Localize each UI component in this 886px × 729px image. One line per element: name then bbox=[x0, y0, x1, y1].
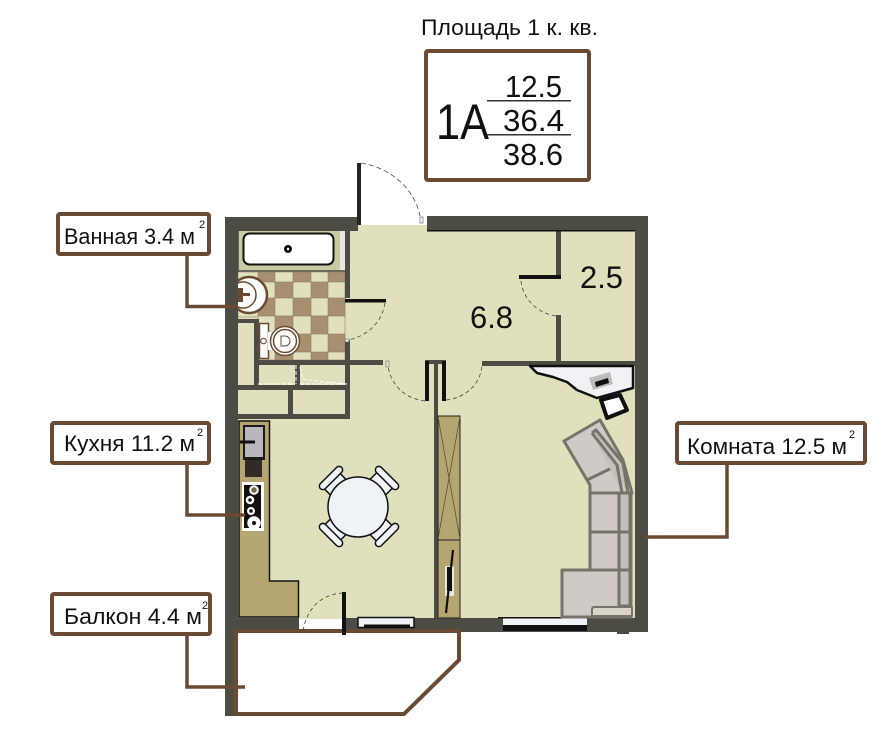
tiled floor bbox=[238, 272, 345, 360]
callout: balcony bbox=[52, 594, 245, 687]
panel: bathroom bbox=[238, 228, 386, 419]
title: Площадь 1 к. кв. bbox=[421, 15, 598, 40]
panel: apartment area summary: 36.4 bbox=[503, 103, 564, 138]
shower screen bbox=[258, 365, 347, 384]
storage room door bbox=[519, 275, 561, 316]
storage niches and walls bbox=[238, 231, 383, 419]
callout: kitchen: 2 bbox=[197, 427, 203, 439]
floor bbox=[238, 225, 636, 619]
balcony door bbox=[303, 592, 346, 635]
sink bbox=[240, 425, 265, 477]
callout: living room: 2 bbox=[849, 429, 855, 441]
entrance door bbox=[357, 163, 423, 225]
callout: bathroom: Ванная 3.4 м bbox=[64, 224, 195, 249]
panel: apartment area summary bbox=[426, 51, 589, 180]
room area numbers bbox=[470, 259, 623, 335]
room area numbers: 6.8 bbox=[470, 299, 513, 335]
panel: kitchen bbox=[239, 421, 400, 617]
room area numbers: 2.5 bbox=[580, 259, 623, 295]
callout: living room: Комната 12.5 м bbox=[687, 434, 847, 459]
balcony door opening bbox=[299, 622, 343, 629]
sofa bbox=[562, 420, 632, 617]
toilet bbox=[260, 324, 300, 358]
room double door bbox=[386, 361, 482, 401]
panel: apartment area summary: 1A bbox=[436, 94, 490, 150]
callout: bathroom bbox=[58, 214, 238, 306]
desk bbox=[530, 366, 633, 398]
stove bbox=[242, 482, 264, 531]
counter bbox=[239, 421, 298, 617]
wardrobe bbox=[438, 416, 460, 540]
room window bbox=[498, 617, 593, 631]
bathtub bbox=[238, 228, 346, 271]
office chair bbox=[601, 395, 627, 418]
balcony outline bbox=[236, 631, 459, 714]
walls bbox=[225, 216, 648, 716]
callout: bathroom: 2 bbox=[199, 219, 205, 231]
dining table with chairs bbox=[318, 465, 400, 548]
washbasin bbox=[231, 277, 267, 313]
callout: kitchen: Кухня 11.2 м bbox=[64, 431, 195, 456]
callout: living room bbox=[646, 423, 865, 537]
kitchen window bbox=[358, 618, 414, 628]
panel: apartment area summary: 12.5 bbox=[505, 69, 562, 104]
callout: kitchen bbox=[52, 423, 245, 515]
panel: apartment area summary: 38.6 bbox=[503, 137, 563, 172]
callout: balcony: Балкон 4.4 м bbox=[64, 604, 202, 629]
callout: balcony: 2 bbox=[202, 600, 208, 612]
tv cabinet bbox=[438, 540, 460, 618]
bathroom door bbox=[345, 299, 386, 342]
